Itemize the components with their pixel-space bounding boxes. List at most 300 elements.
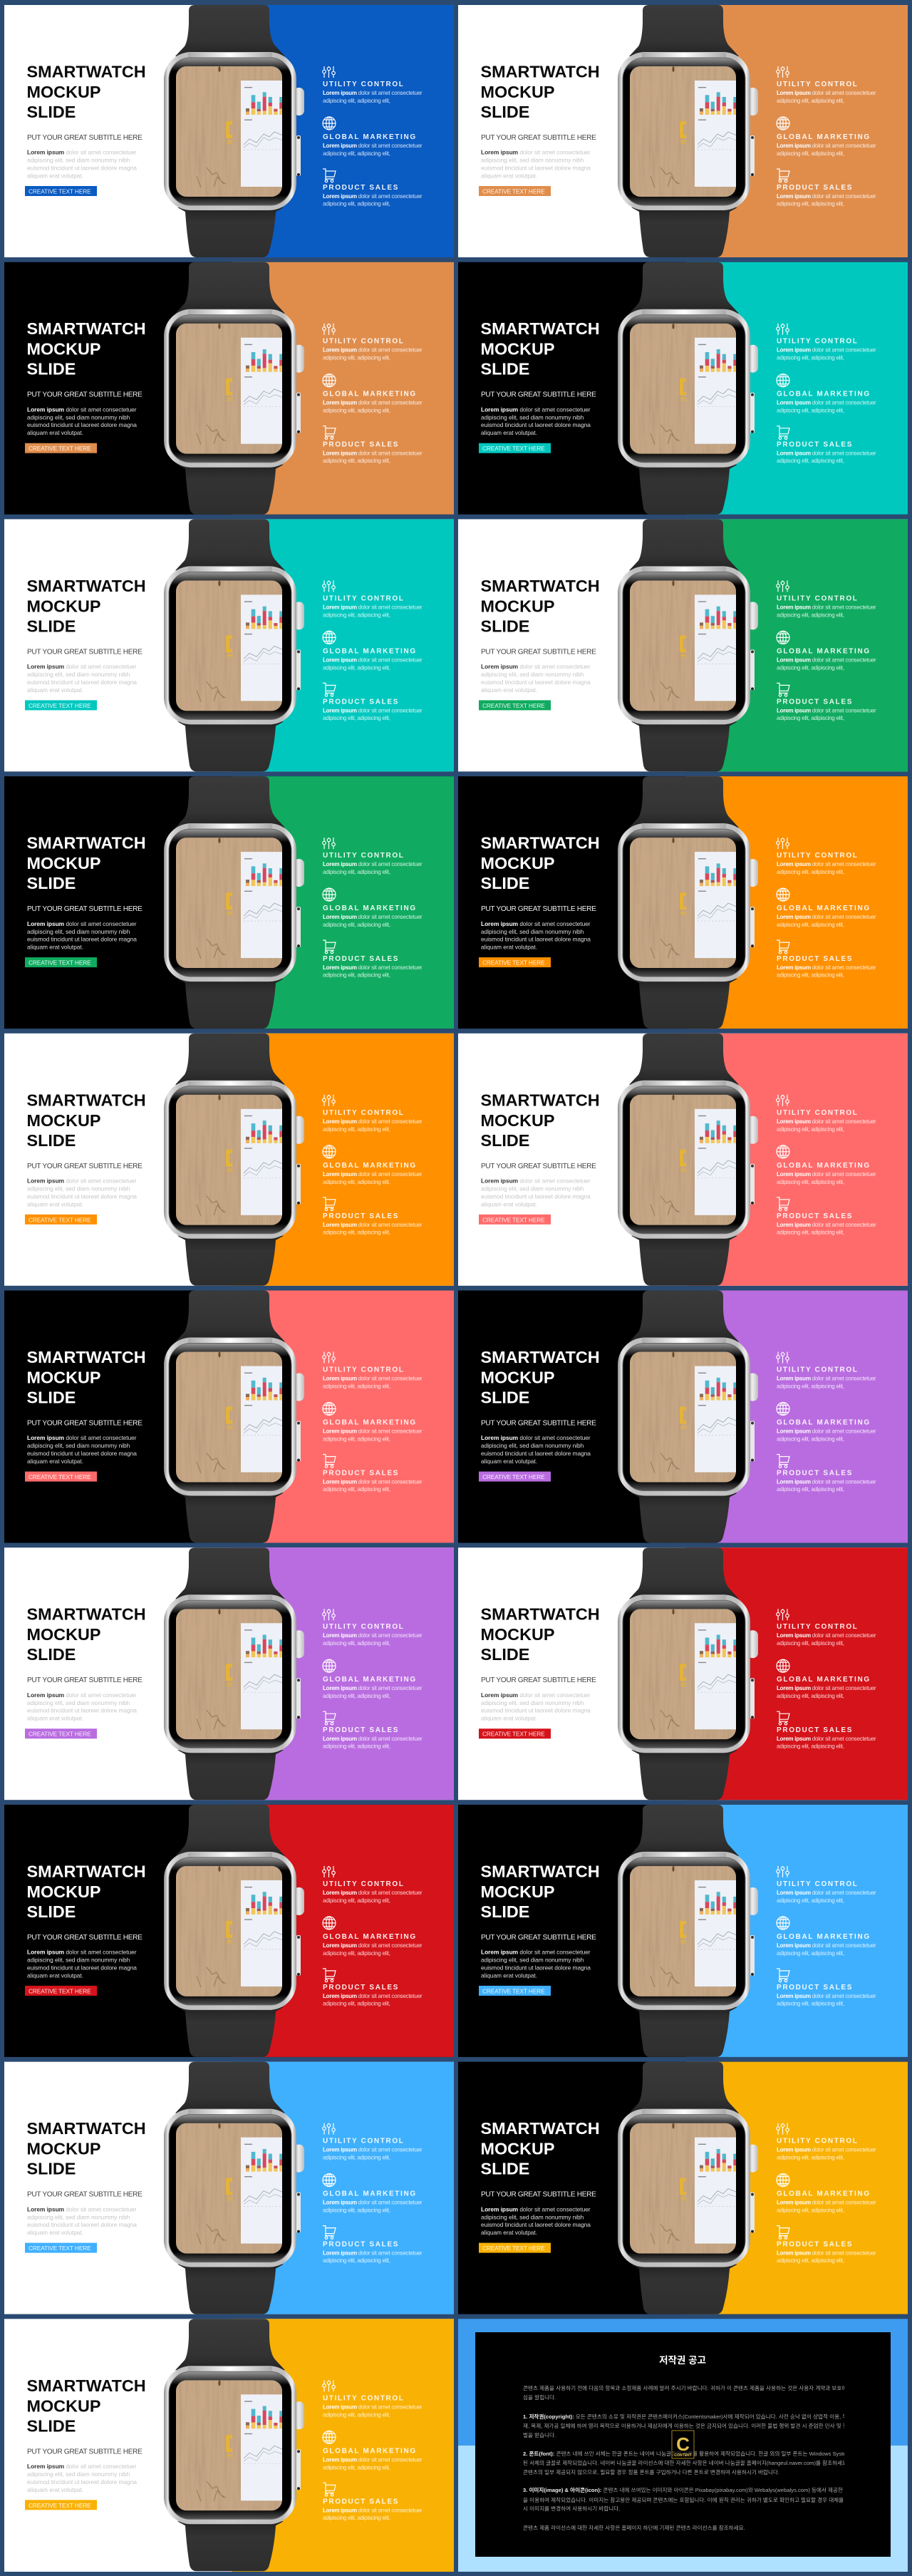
description: Lorem ipsum <box>323 914 357 920</box>
description: dolor sit amet consectetuer <box>358 914 422 920</box>
title: MOCKUP <box>27 83 100 101</box>
body text: euismod tincidunt ut laoreet dolore magna <box>481 1450 591 1457</box>
body text: adipiscing elit, sed diam nonummy nibh <box>481 1699 584 1706</box>
heading: GLOBAL MARKETING <box>323 2190 417 2198</box>
description: adipiscing elit, adipiscing elit, <box>777 2257 844 2264</box>
description: Lorem ipsum <box>777 1942 811 1949</box>
title: MOCKUP <box>27 1369 100 1387</box>
feature: global marketing <box>777 1403 876 1443</box>
description: Lorem ipsum <box>777 1118 811 1125</box>
heading: PRODUCT SALES <box>777 1212 853 1220</box>
description: adipiscing elit, adipiscing elit, <box>323 150 390 157</box>
feature: product sales <box>777 169 876 207</box>
description: adipiscing elit, adipiscing elit, <box>777 2207 844 2214</box>
feature: utility control <box>777 1351 876 1390</box>
description: adipiscing elit, adipiscing elit, <box>323 922 390 928</box>
heading: PRODUCT SALES <box>777 184 853 192</box>
title: SMARTWATCH <box>27 1862 146 1880</box>
title: SLIDE <box>480 2160 529 2178</box>
watermark logo: CONTENT <box>674 2453 692 2458</box>
panel: slide 5 white and teal <box>4 519 454 771</box>
smartwatch mockup <box>618 5 758 257</box>
description: dolor sit amet consectetuer <box>358 1118 422 1125</box>
description: Lorem ipsum <box>323 450 357 457</box>
description: Lorem ipsum <box>777 347 811 354</box>
feature: global marketing <box>323 117 423 157</box>
feature: utility control <box>777 1866 876 1904</box>
heading: PRODUCT SALES <box>323 1470 399 1477</box>
colour panel <box>232 1290 454 1542</box>
feature: utility control <box>323 1866 423 1904</box>
notice body text: 된 서체의 글꼴로 제작되었습니다. 네이버 나눔글꼴 라이선스에 대한 자세한 사항은 네이버 나눔글꼴 홈페이지(hangeul.naver.com)를 참조하세요. 폰트는 <box>523 2459 865 2466</box>
colour panel <box>232 5 454 257</box>
feature: utility control <box>323 2123 423 2161</box>
body text: Lorem ipsum <box>481 2205 518 2212</box>
heading: PRODUCT SALES <box>777 698 853 706</box>
description: Lorem ipsum <box>777 1222 811 1228</box>
body text: dolor sit amet consectetuer <box>66 149 137 156</box>
icon: sliders <box>323 580 335 592</box>
smartwatch mockup <box>618 262 758 515</box>
icon: globe <box>777 1403 789 1416</box>
icon: globe <box>323 1659 336 1672</box>
panel: slide 10 white and coral <box>458 1034 908 1286</box>
body text: Lorem ipsum <box>27 1178 64 1185</box>
title: MOCKUP <box>27 1882 100 1901</box>
button: CREATIVE TEXT HERE <box>482 1987 545 1994</box>
body text: aliquam erat volutpat. <box>27 172 83 180</box>
body text: Lorem ipsum <box>27 1691 64 1699</box>
title: SMARTWATCH <box>480 577 600 595</box>
feature: global marketing <box>777 1145 876 1185</box>
button <box>25 700 97 710</box>
colour panel <box>686 1805 908 2057</box>
feature: global marketing <box>323 1917 423 1957</box>
smartwatch mockup <box>618 1805 758 2057</box>
button: CREATIVE TEXT HERE <box>482 1216 545 1223</box>
icon: sliders <box>777 2123 789 2135</box>
body text: euismod tincidunt ut laoreet dolore magna <box>27 1707 137 1714</box>
body text: aliquam erat volutpat. <box>27 1200 83 1207</box>
colour panel <box>232 1034 454 1286</box>
icon: globe <box>323 2174 336 2187</box>
button <box>25 1215 97 1225</box>
subtitle: PUT YOUR GREAT SUBTITLE HERE <box>481 391 596 399</box>
panel: slide 9 white and bright orange <box>4 1034 454 1286</box>
smartwatch mockup <box>164 5 304 257</box>
heading: UTILITY CONTROL <box>323 852 405 860</box>
title: MOCKUP <box>27 340 100 359</box>
button <box>25 2500 97 2510</box>
icon: sliders <box>777 1866 789 1877</box>
icon: cart <box>323 1197 336 1210</box>
panel: slide 14 white and red <box>458 1547 908 1800</box>
description: dolor sit amet consectetuer <box>812 1890 876 1896</box>
heading: GLOBAL MARKETING <box>323 1933 417 1941</box>
colour panel <box>232 2319 454 2572</box>
smartwatch mockup <box>618 2062 758 2314</box>
heading: UTILITY CONTROL <box>323 81 405 88</box>
body text: dolor sit amet consectetuer <box>519 149 591 156</box>
button <box>25 1986 97 1996</box>
description: adipiscing elit, adipiscing elit, <box>777 1693 844 1699</box>
description: dolor sit amet consectetuer <box>812 2250 876 2257</box>
heading: PRODUCT SALES <box>323 698 399 706</box>
description: Lorem ipsum <box>777 1428 811 1434</box>
description: adipiscing elit, adipiscing elit, <box>323 612 390 618</box>
subtitle: PUT YOUR GREAT SUBTITLE HERE <box>27 648 142 656</box>
body text: euismod tincidunt ut laoreet dolore magna <box>481 1707 591 1714</box>
body text: euismod tincidunt ut laoreet dolore magna <box>27 936 137 943</box>
colour panel <box>232 519 454 771</box>
description: Lorem ipsum <box>777 2250 811 2257</box>
icon: cart <box>323 2226 336 2239</box>
description: dolor sit amet consectetuer <box>358 1376 422 1381</box>
description: Lorem ipsum <box>323 1736 357 1742</box>
panel: slide 3 black and orange <box>4 262 454 515</box>
description: dolor sit amet consectetuer <box>812 1118 876 1125</box>
description: dolor sit amet consectetuer <box>812 1685 876 1691</box>
description: adipiscing elit, adipiscing elit, <box>777 1179 844 1185</box>
feature: utility control <box>777 838 876 875</box>
description: adipiscing elit, adipiscing elit, <box>777 408 844 414</box>
colour panel <box>686 2062 908 2314</box>
icon: cart <box>777 1711 789 1725</box>
feature: utility control <box>777 2123 876 2161</box>
title: MOCKUP <box>27 854 100 872</box>
body text: euismod tincidunt ut laoreet dolore magna <box>27 2478 137 2485</box>
icon: sliders <box>323 1095 335 1106</box>
title: SMARTWATCH <box>27 1348 146 1366</box>
body text: adipiscing elit, sed diam nonummy nibh <box>27 1699 130 1706</box>
title: SMARTWATCH <box>27 834 146 852</box>
feature: product sales <box>323 2226 423 2264</box>
description: Lorem ipsum <box>777 1736 811 1742</box>
description: adipiscing elit, adipiscing elit, <box>323 1126 390 1133</box>
title: SLIDE <box>480 1131 529 1150</box>
button <box>25 443 97 453</box>
icon: cart <box>777 2226 789 2239</box>
description: dolor sit amet consectetuer <box>358 1428 422 1434</box>
button: CREATIVE TEXT HERE <box>28 1987 91 1994</box>
description: Lorem ipsum <box>777 914 811 920</box>
description: adipiscing elit, adipiscing elit, <box>323 98 390 104</box>
title: SLIDE <box>27 617 76 635</box>
description: dolor sit amet consectetuer <box>812 450 876 457</box>
description: Lorem ipsum <box>323 1428 357 1434</box>
icon: sliders <box>777 1609 789 1620</box>
description: Lorem ipsum <box>777 2147 811 2153</box>
description: adipiscing elit, adipiscing elit, <box>777 1436 844 1443</box>
panel: copyright notice <box>458 2319 908 2572</box>
title: SMARTWATCH <box>480 1862 600 1880</box>
description: Lorem ipsum <box>777 143 811 149</box>
colour panel <box>686 1547 908 1800</box>
description: dolor sit amet consectetuer <box>358 707 422 713</box>
feature: product sales <box>323 683 423 721</box>
button <box>25 1471 97 1481</box>
title: SMARTWATCH <box>480 1348 600 1366</box>
feature: product sales <box>777 940 876 979</box>
description: Lorem ipsum <box>777 1171 811 1178</box>
panel: slide 15 black and red <box>4 1805 454 2057</box>
panel: slide 13 white and purple <box>4 1547 454 1800</box>
button <box>479 2243 551 2253</box>
description: adipiscing elit, adipiscing elit, <box>777 869 844 875</box>
heading: GLOBAL MARKETING <box>777 1933 871 1941</box>
feature: global marketing <box>777 117 876 157</box>
description: adipiscing elit, adipiscing elit, <box>777 1486 844 1493</box>
feature: product sales <box>323 426 423 464</box>
body text: Lorem ipsum <box>481 1949 518 1956</box>
icon: globe <box>323 1917 336 1930</box>
title: SMARTWATCH <box>480 63 600 81</box>
button: CREATIVE TEXT HERE <box>28 2502 91 2509</box>
heading: UTILITY CONTROL <box>323 594 405 602</box>
description: adipiscing elit, adipiscing elit, <box>777 201 844 207</box>
icon: sliders <box>777 324 789 335</box>
smartwatch mockup <box>618 1034 758 1286</box>
description: dolor sit amet consectetuer <box>812 347 876 354</box>
heading: PRODUCT SALES <box>777 1726 853 1734</box>
description: dolor sit amet consectetuer <box>358 193 422 200</box>
subtitle: PUT YOUR GREAT SUBTITLE HERE <box>27 134 142 142</box>
heading: PRODUCT SALES <box>777 955 853 963</box>
description: dolor sit amet consectetuer <box>358 964 422 971</box>
body text: aliquam erat volutpat. <box>27 429 83 436</box>
feature: utility control <box>777 324 876 361</box>
description: adipiscing elit, adipiscing elit, <box>777 458 844 464</box>
icon: cart <box>777 1454 789 1468</box>
description: adipiscing elit, adipiscing elit, <box>777 355 844 361</box>
heading: PRODUCT SALES <box>323 1212 399 1220</box>
feature: product sales <box>323 2483 423 2521</box>
heading: PRODUCT SALES <box>777 1984 853 1992</box>
icon: sliders <box>323 1866 335 1877</box>
subtitle: PUT YOUR GREAT SUBTITLE HERE <box>481 1676 596 1684</box>
description: Lorem ipsum <box>323 1993 357 1999</box>
description: dolor sit amet consectetuer <box>812 1428 876 1434</box>
heading: UTILITY CONTROL <box>777 338 859 346</box>
body text: adipiscing elit, sed diam nonummy nibh <box>27 413 130 421</box>
feature: product sales <box>323 940 423 979</box>
body text: aliquam erat volutpat. <box>481 172 537 180</box>
icon: cart <box>323 1454 336 1468</box>
icon: globe <box>323 888 336 901</box>
description: Lorem ipsum <box>323 193 357 200</box>
title: MOCKUP <box>480 597 554 615</box>
body text: Lorem ipsum <box>481 1178 518 1185</box>
button <box>479 1986 551 1996</box>
heading: UTILITY CONTROL <box>777 1880 859 1888</box>
heading: GLOBAL MARKETING <box>323 1418 417 1427</box>
button: CREATIVE TEXT HERE <box>28 1473 91 1480</box>
feature: utility control <box>323 1609 423 1647</box>
description: dolor sit amet consectetuer <box>812 2200 876 2206</box>
smartwatch mockup <box>618 519 758 771</box>
feature: product sales <box>777 1454 876 1493</box>
description: adipiscing elit, adipiscing elit, <box>323 664 390 671</box>
button: CREATIVE TEXT HERE <box>28 188 91 195</box>
icon: sliders <box>323 324 335 335</box>
icon: globe <box>777 374 789 387</box>
description: Lorem ipsum <box>777 604 811 610</box>
description: adipiscing elit, adipiscing elit, <box>323 1229 390 1235</box>
body text: euismod tincidunt ut laoreet dolore magna <box>481 2221 591 2228</box>
icon: sliders <box>777 1351 789 1363</box>
feature: utility control <box>323 66 423 104</box>
icon: globe <box>323 1403 336 1416</box>
panel: slide 17 white and sky blue <box>4 2062 454 2314</box>
body text: adipiscing elit, sed diam nonummy nibh <box>27 928 130 935</box>
feature: product sales <box>777 1197 876 1235</box>
title: SLIDE <box>480 1645 529 1664</box>
description: dolor sit amet consectetuer <box>358 1685 422 1691</box>
title: SMARTWATCH <box>27 319 146 338</box>
colour panel <box>686 776 908 1029</box>
description: adipiscing elit, adipiscing elit, <box>777 1383 844 1390</box>
title: MOCKUP <box>480 1369 554 1387</box>
description: Lorem ipsum <box>323 1890 357 1896</box>
title: SLIDE <box>480 617 529 635</box>
heading: UTILITY CONTROL <box>777 1623 859 1631</box>
feature: global marketing <box>777 631 876 671</box>
description: adipiscing elit, adipiscing elit, <box>323 2000 390 2006</box>
description: adipiscing elit, adipiscing elit, <box>777 150 844 157</box>
title: MOCKUP <box>27 597 100 615</box>
button: CREATIVE TEXT HERE <box>482 702 545 709</box>
body text: dolor sit amet consectetuer <box>66 920 137 927</box>
description: dolor sit amet consectetuer <box>358 2200 422 2206</box>
description: dolor sit amet consectetuer <box>812 1376 876 1381</box>
icon: cart <box>777 169 789 182</box>
feature: global marketing <box>323 374 423 414</box>
body text: dolor sit amet consectetuer <box>66 2463 137 2470</box>
title: SMARTWATCH <box>480 2119 600 2138</box>
description: Lorem ipsum <box>323 656 357 663</box>
description: adipiscing elit, adipiscing elit, <box>323 2207 390 2214</box>
body text: aliquam erat volutpat. <box>481 1715 537 1722</box>
body text: aliquam erat volutpat. <box>481 1972 537 1979</box>
heading: GLOBAL MARKETING <box>777 133 871 141</box>
colour panel <box>232 1547 454 1800</box>
title: SMARTWATCH <box>27 2376 146 2395</box>
heading: GLOBAL MARKETING <box>323 647 417 655</box>
description: Lorem ipsum <box>777 656 811 663</box>
feature: utility control <box>777 580 876 618</box>
body text: euismod tincidunt ut laoreet dolore magna <box>481 1192 591 1200</box>
body text: aliquam erat volutpat. <box>481 686 537 694</box>
heading: GLOBAL MARKETING <box>777 2190 871 2198</box>
body text: Lorem ipsum <box>27 663 64 670</box>
heading: GLOBAL MARKETING <box>323 2447 417 2455</box>
description: dolor sit amet consectetuer <box>358 2456 422 2463</box>
feature: utility control <box>323 324 423 361</box>
smartwatch mockup <box>164 2062 304 2314</box>
body text: aliquam erat volutpat. <box>481 944 537 951</box>
button: CREATIVE TEXT HERE <box>482 959 545 967</box>
button <box>479 443 551 453</box>
button <box>479 957 551 967</box>
description: Lorem ipsum <box>777 400 811 406</box>
icon: globe <box>777 631 789 644</box>
title: SLIDE <box>27 2416 76 2435</box>
notice body text: 3. 이미지(image) & 아이콘(icon): 콘텐츠 내에 쓰여있는 이미지와 아이콘은 Pixabay(pixabay.com)와 Webalys(webalys.com) 등에서 제공한 무료 저작물 <box>523 2486 871 2493</box>
button <box>479 1471 551 1481</box>
description: adipiscing elit, adipiscing elit, <box>323 1950 390 1957</box>
heading: UTILITY CONTROL <box>323 338 405 346</box>
icon: sliders <box>777 580 789 592</box>
feature: product sales <box>323 1454 423 1493</box>
description: dolor sit amet consectetuer <box>358 1993 422 1999</box>
icon: globe <box>323 117 336 130</box>
feature: product sales <box>777 2226 876 2264</box>
body text: Lorem ipsum <box>481 920 518 927</box>
smartwatch mockup <box>164 519 304 771</box>
feature: product sales <box>323 1197 423 1235</box>
subtitle: PUT YOUR GREAT SUBTITLE HERE <box>27 1934 142 1942</box>
heading: PRODUCT SALES <box>323 955 399 963</box>
heading: GLOBAL MARKETING <box>777 1162 871 1170</box>
heading: GLOBAL MARKETING <box>777 647 871 655</box>
heading: PRODUCT SALES <box>777 441 853 449</box>
description: dolor sit amet consectetuer <box>358 656 422 663</box>
description: Lorem ipsum <box>323 604 357 610</box>
watermark logo: C <box>676 2433 690 2455</box>
body text: euismod tincidunt ut laoreet dolore magna <box>27 1964 137 1971</box>
title: SMARTWATCH <box>27 1091 146 1109</box>
body text: adipiscing elit, sed diam nonummy nibh <box>27 671 130 678</box>
description: adipiscing elit, adipiscing elit, <box>323 2464 390 2471</box>
smartwatch mockup <box>164 1805 304 2057</box>
icon: cart <box>323 940 336 954</box>
body text: dolor sit amet consectetuer <box>66 2205 137 2212</box>
smartwatch mockup <box>618 776 758 1029</box>
description: adipiscing elit, adipiscing elit, <box>777 2000 844 2006</box>
body text: euismod tincidunt ut laoreet dolore magna <box>481 164 591 171</box>
title: SLIDE <box>27 1389 76 1407</box>
icon: cart <box>777 940 789 954</box>
title: MOCKUP <box>27 1625 100 1644</box>
body text: aliquam erat volutpat. <box>27 686 83 694</box>
notice body text: 2. 폰트(font): 콘텐츠 내에 쓰인 서체는 한글 폰트는 네이버 나눔글꼴의 서체를 활용하여 제작되었습니다. 한글 외의 일부 폰트는 Windows System에 포함 <box>523 2450 867 2457</box>
body text: adipiscing elit, sed diam nonummy nibh <box>27 157 130 164</box>
body text: dolor sit amet consectetuer <box>66 1178 137 1185</box>
title: MOCKUP <box>480 1882 554 1901</box>
body text: dolor sit amet consectetuer <box>66 1691 137 1699</box>
description: dolor sit amet consectetuer <box>358 861 422 867</box>
description: adipiscing elit, adipiscing elit, <box>777 972 844 979</box>
feature: utility control <box>323 838 423 875</box>
notice body text <box>523 2384 871 2531</box>
icon: globe <box>323 374 336 387</box>
heading: GLOBAL MARKETING <box>777 391 871 398</box>
feature: global marketing <box>323 888 423 928</box>
heading: PRODUCT SALES <box>777 2241 853 2249</box>
description: Lorem ipsum <box>323 1222 357 1228</box>
description: adipiscing elit, adipiscing elit, <box>777 1743 844 1750</box>
panel: slide 2 white and orange <box>458 5 908 257</box>
description: Lorem ipsum <box>323 143 357 149</box>
button <box>479 186 551 196</box>
description: dolor sit amet consectetuer <box>812 964 876 971</box>
body text: euismod tincidunt ut laoreet dolore magna <box>27 679 137 686</box>
description: Lorem ipsum <box>323 400 357 406</box>
title: SMARTWATCH <box>480 319 600 338</box>
description: adipiscing elit, adipiscing elit, <box>323 972 390 979</box>
feature: global marketing <box>777 888 876 928</box>
heading: PRODUCT SALES <box>323 1984 399 1992</box>
